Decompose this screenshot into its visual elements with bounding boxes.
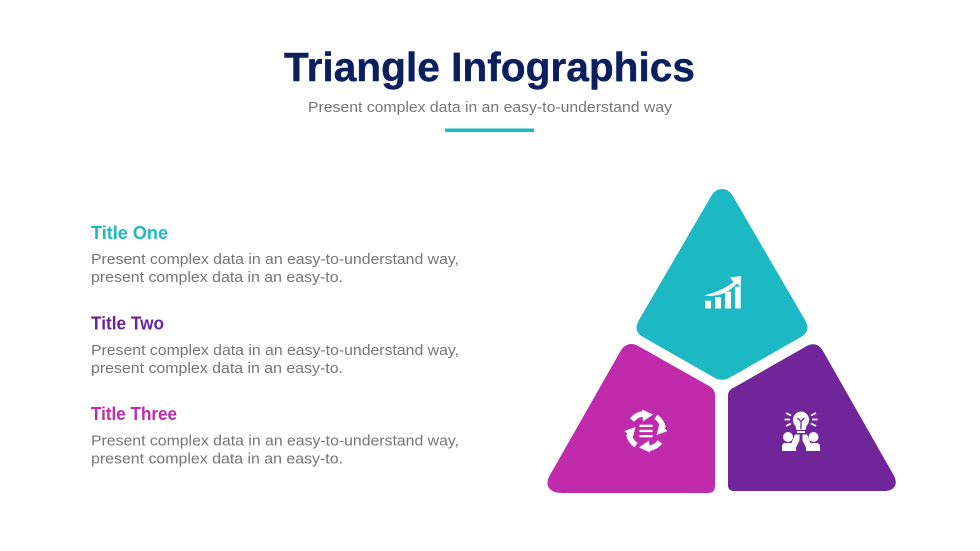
text block: title three: Title Three xyxy=(91,404,177,424)
text block: title one: present complex data in an easy-to. xyxy=(91,269,343,286)
icon: growth chart xyxy=(704,276,741,308)
icon: people with lightbulb xyxy=(782,412,820,451)
text block: title two: Title Two xyxy=(91,314,164,334)
icon: cycle with list xyxy=(624,410,668,452)
text block: title one xyxy=(91,223,459,286)
text block: title one: Title One xyxy=(91,223,168,243)
title underline xyxy=(445,128,534,132)
panel: top teal segment xyxy=(637,189,807,380)
text block: title two: Present complex data in an easy-to-understand way, xyxy=(91,342,459,359)
panel: right purple segment xyxy=(728,344,896,491)
text block: title two xyxy=(91,314,459,377)
title: Triangle Infographics xyxy=(284,44,695,90)
text block: title one: Present complex data in an easy-to-understand way, xyxy=(91,251,459,268)
text block: title three: present complex data in an easy-to. xyxy=(91,450,343,468)
subtitle: Present complex data in an easy-to-understand way xyxy=(308,99,673,116)
triangle diagram xyxy=(547,189,896,493)
text block: title three xyxy=(91,404,459,468)
text block: title two: present complex data in an easy-to. xyxy=(91,360,343,377)
text block: title three: Present complex data in an easy-to-understand way, xyxy=(91,432,459,450)
panel: left magenta segment xyxy=(547,344,715,493)
